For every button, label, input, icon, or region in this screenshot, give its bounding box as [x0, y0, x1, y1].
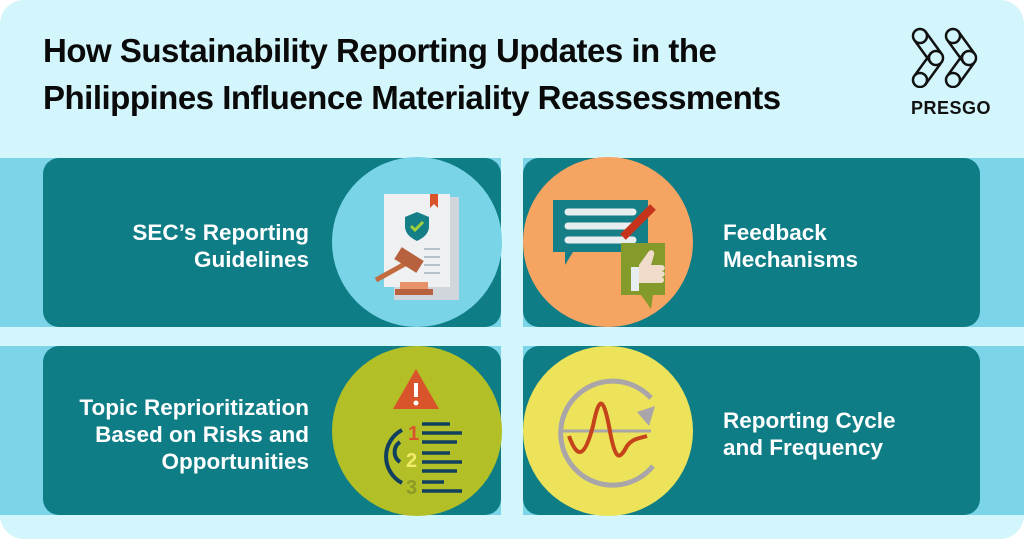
icon: feedback speech bubbles — [523, 157, 693, 327]
panel: reporting cycle: Reporting Cycle — [723, 408, 896, 433]
panel: topic reprioritization: Based on Risks and — [95, 422, 309, 447]
icon: prioritization list: 3 — [406, 477, 417, 499]
icon: document with gavel — [332, 157, 502, 327]
panel: feedback: Mechanisms — [723, 247, 858, 272]
title — [43, 32, 781, 116]
panel: topic reprioritization: Opportunities — [162, 449, 309, 474]
panel: SEC guidelines: Guidelines — [194, 247, 309, 272]
panel: feedback: Feedback — [723, 220, 827, 245]
title: How Sustainability Reporting Updates in the — [43, 32, 716, 69]
icon: prioritization list: 2 — [406, 450, 417, 472]
icon: prioritization list — [332, 346, 502, 516]
panel: SEC guidelines — [43, 158, 501, 327]
panel: feedback — [523, 158, 980, 327]
title: Philippines Influence Materiality Reassessments — [43, 79, 781, 116]
logo: PRESGO: PRESGO — [911, 98, 991, 118]
panel: SEC guidelines: SEC’s Reporting — [132, 220, 309, 245]
logo: PRESGO — [911, 28, 991, 118]
icon: prioritization list: 1 — [408, 423, 419, 445]
panel: topic reprioritization: Topic Reprioritization — [79, 395, 309, 420]
panel: topic reprioritization — [43, 346, 501, 515]
icon: cycle waveform — [523, 346, 693, 516]
panel: reporting cycle — [523, 346, 980, 515]
panel: reporting cycle: and Frequency — [723, 435, 883, 460]
